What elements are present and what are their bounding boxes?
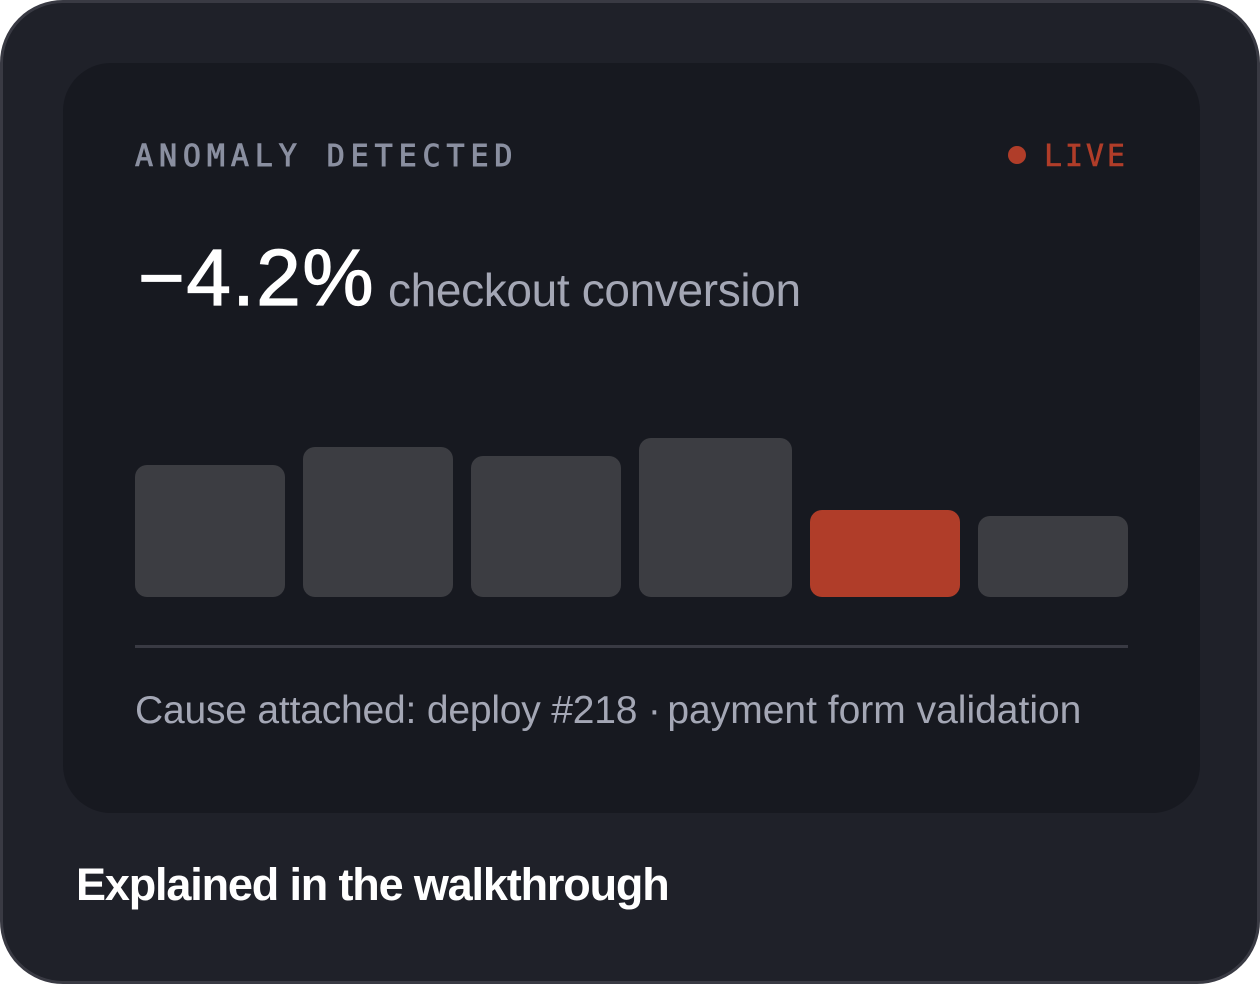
bar 2 xyxy=(303,447,453,597)
bar 3 xyxy=(471,456,621,597)
headline metric xyxy=(138,233,801,322)
metric label: checkout conversion xyxy=(388,264,801,316)
bar 4 xyxy=(639,438,792,597)
caption: Explained in the walkthrough xyxy=(76,859,669,910)
cause text: Cause attached: deploy #218 · payment form validation xyxy=(135,689,1081,732)
eyebrow label: ANOMALY DETECTED xyxy=(135,139,518,174)
icon: live dot xyxy=(1008,146,1026,164)
live label: LIVE xyxy=(1044,139,1128,174)
live indicator xyxy=(1008,139,1128,174)
bar 6 xyxy=(978,516,1128,597)
bar chart xyxy=(135,438,1128,597)
bar 5: anomaly xyxy=(810,510,960,597)
metric value: −4.2% xyxy=(138,233,375,322)
bar 1 xyxy=(135,465,285,597)
panel: anomaly card xyxy=(63,63,1200,813)
